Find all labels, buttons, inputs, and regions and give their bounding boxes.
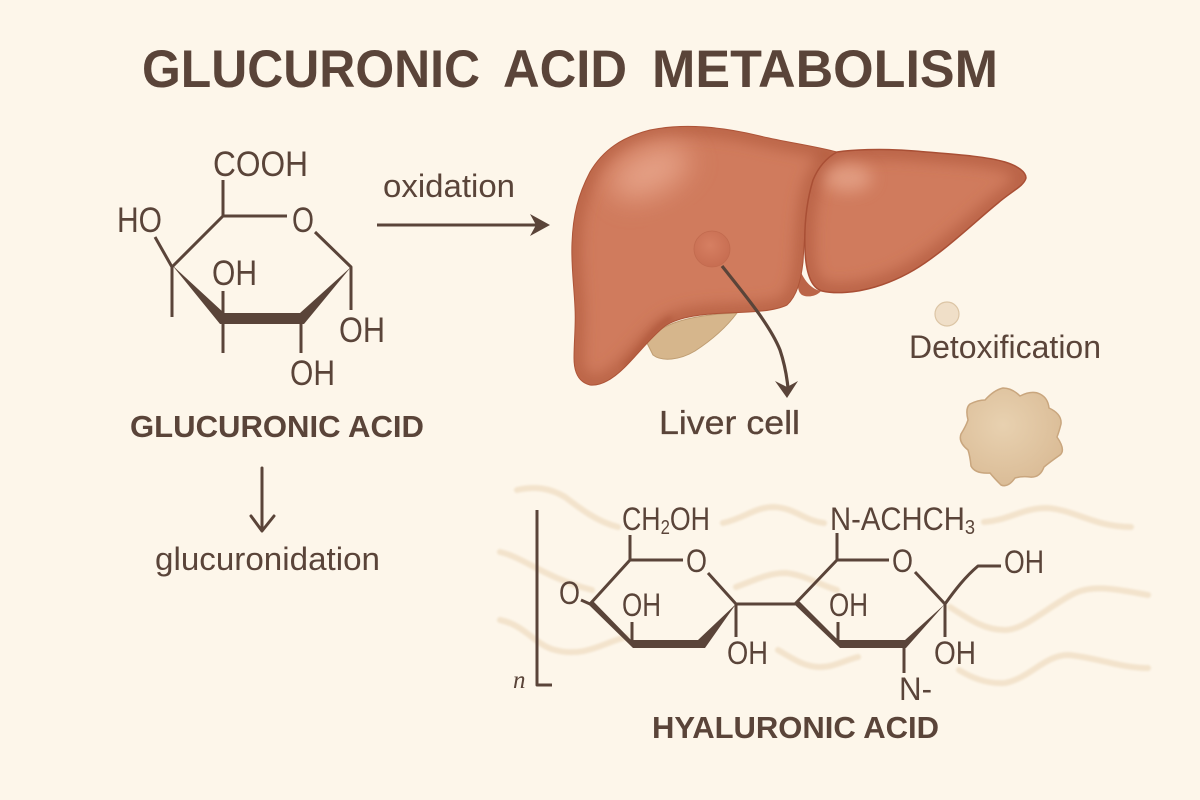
label: detoxification: Detoxification (909, 329, 1101, 365)
right lobe (572, 126, 837, 385)
diagram: glucuronic acid structure: HO (117, 201, 162, 240)
liver spot (694, 231, 730, 267)
label: liver cell: Liver cell (659, 404, 800, 441)
diagram: glucuronic acid structure: O (292, 201, 314, 240)
diagram: hyaluronic acid structure: OH (622, 587, 661, 623)
arrow: oxidation (377, 214, 550, 236)
label: hyaluronic acid: HYALURONIC ACID (652, 710, 939, 745)
icon: small circle (935, 302, 959, 326)
diagram: hyaluronic acid structure: OH (670, 501, 710, 537)
gallbladder (647, 313, 737, 359)
diagram: hyaluronic acid structure (513, 501, 1044, 707)
diagram: hyaluronic acid structure: N- (899, 671, 932, 707)
diagram: hyaluronic acid structure: N-ACHCH (830, 501, 978, 537)
arrow: liver cell (722, 266, 798, 398)
diagram: glucuronic acid structure (117, 145, 385, 393)
arrow: glucuronidation (251, 468, 274, 531)
diagram: hyaluronic acid structure: O (892, 543, 913, 579)
diagram: glucuronic acid structure: OH (339, 311, 385, 350)
diagram: hyaluronic acid structure: 3 (965, 517, 975, 539)
icon: cell blob (960, 388, 1062, 486)
diagram: glucuronic acid structure: OH (290, 354, 335, 393)
diagram: glucuronic acid structure: OH (212, 254, 257, 293)
diagram: hyaluronic acid structure: OH (934, 635, 976, 671)
diagram: hyaluronic acid structure: OH (1004, 544, 1044, 580)
title: GLUCURONIC (142, 40, 480, 99)
diagram: hyaluronic acid structure: 2 (661, 517, 670, 539)
decoration: wavy fibres (500, 488, 1148, 683)
diagram: hyaluronic acid structure: O (559, 575, 580, 611)
label: oxidation: oxidation (383, 168, 515, 204)
title: METABOLISM (652, 40, 998, 99)
label: glucuronic acid: GLUCURONIC ACID (130, 409, 424, 444)
illustration: liver (572, 126, 1026, 385)
diagram: hyaluronic acid structure: OH (727, 635, 768, 671)
diagram: hyaluronic acid structure: O (686, 543, 707, 579)
title: ACID (503, 40, 627, 99)
diagram: hyaluronic acid structure: OH (829, 587, 868, 623)
diagram: hyaluronic acid structure: CH (622, 501, 668, 537)
diagram: hyaluronic acid structure: n (513, 667, 526, 694)
small lobe (798, 270, 821, 296)
label: glucuronidation: glucuronidation (155, 541, 380, 577)
left lobe (805, 149, 1026, 293)
title (142, 40, 998, 99)
diagram: glucuronic acid structure: COOH (213, 145, 308, 184)
